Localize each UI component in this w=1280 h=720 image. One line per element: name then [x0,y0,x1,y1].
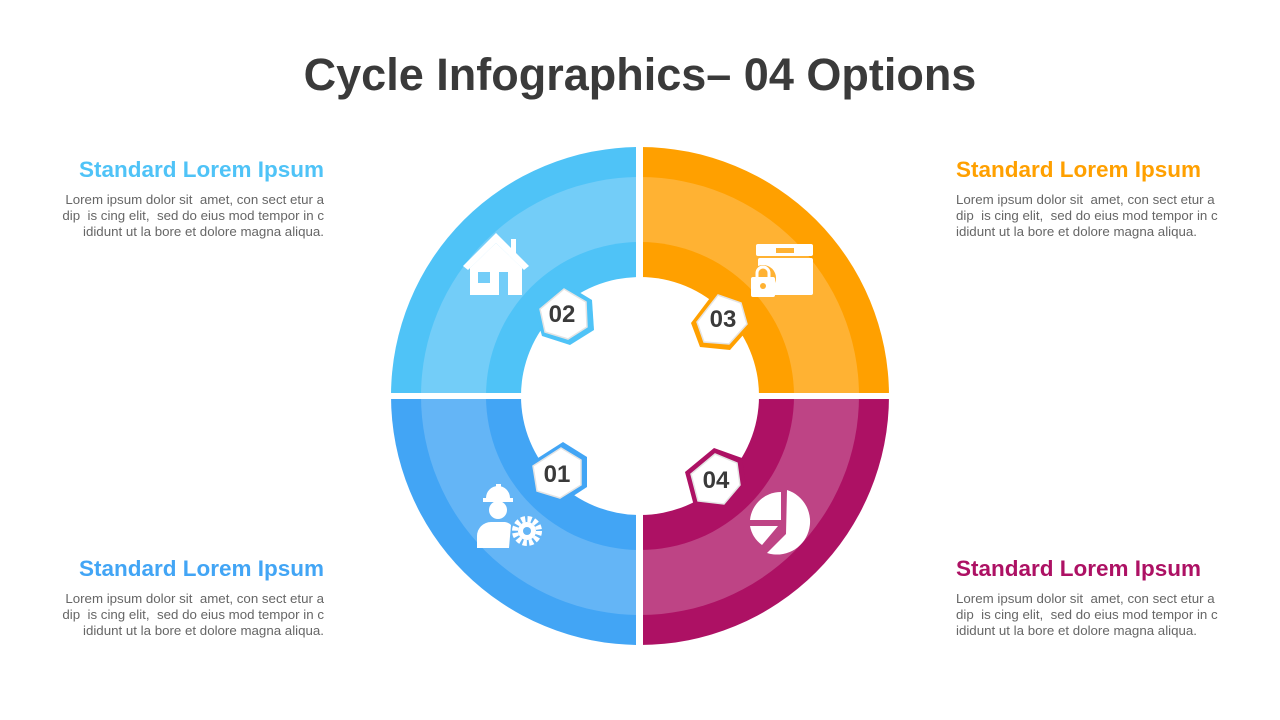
text: bottom left: Standard Lorem Ipsum [79,556,324,581]
text: top right [956,157,1218,239]
icon: pie chart [750,490,810,555]
badge 04 [685,448,746,510]
ring: quadrant 02 [391,147,640,396]
text: top left [62,157,324,239]
text: bottom right: Standard Lorem Ipsum [956,556,1201,581]
text: bottom left: Lorem ipsum dolor sit amet, con sect etur a dip is cing elit, sed do eius mod tempor in c ididunt ut la bore et dolore magna aliqua. [62,591,324,638]
text: top right: Standard Lorem Ipsum [956,157,1201,182]
text: bottom right [956,556,1218,638]
text: top right: Lorem ipsum dolor sit amet, con sect etur a dip is cing elit, sed do eius mod tempor in c ididunt ut la bore et dolore magna aliqua. [956,192,1218,239]
icon: house [463,233,529,295]
text: bottom left [62,556,324,638]
badge 02 [534,283,594,345]
ring: quadrant 03 [640,147,889,396]
title: Cycle Infographics– 04 Options [304,49,976,100]
ring: quadrant 04 [640,396,889,645]
badge 03: 03 [710,306,736,333]
badge 01 [527,442,587,504]
badge 01: 01 [544,461,570,488]
text: bottom right: Lorem ipsum dolor sit amet, con sect etur a dip is cing elit, sed do eius mod tempor in c ididunt ut la bore et dolore magna aliqua. [956,591,1218,638]
icon: lock box [750,244,813,297]
badge 04: 04 [703,467,730,494]
icon: worker with gear [477,484,541,548]
ring: quadrant 01 [391,396,640,645]
text: top left: Lorem ipsum dolor sit amet, con sect etur a dip is cing elit, sed do eius mod tempor in c ididunt ut la bore et dolore magna aliqua. [62,192,324,239]
text: top left: Standard Lorem Ipsum [79,157,324,182]
badge 03 [691,290,752,350]
badge 02: 02 [549,301,575,328]
